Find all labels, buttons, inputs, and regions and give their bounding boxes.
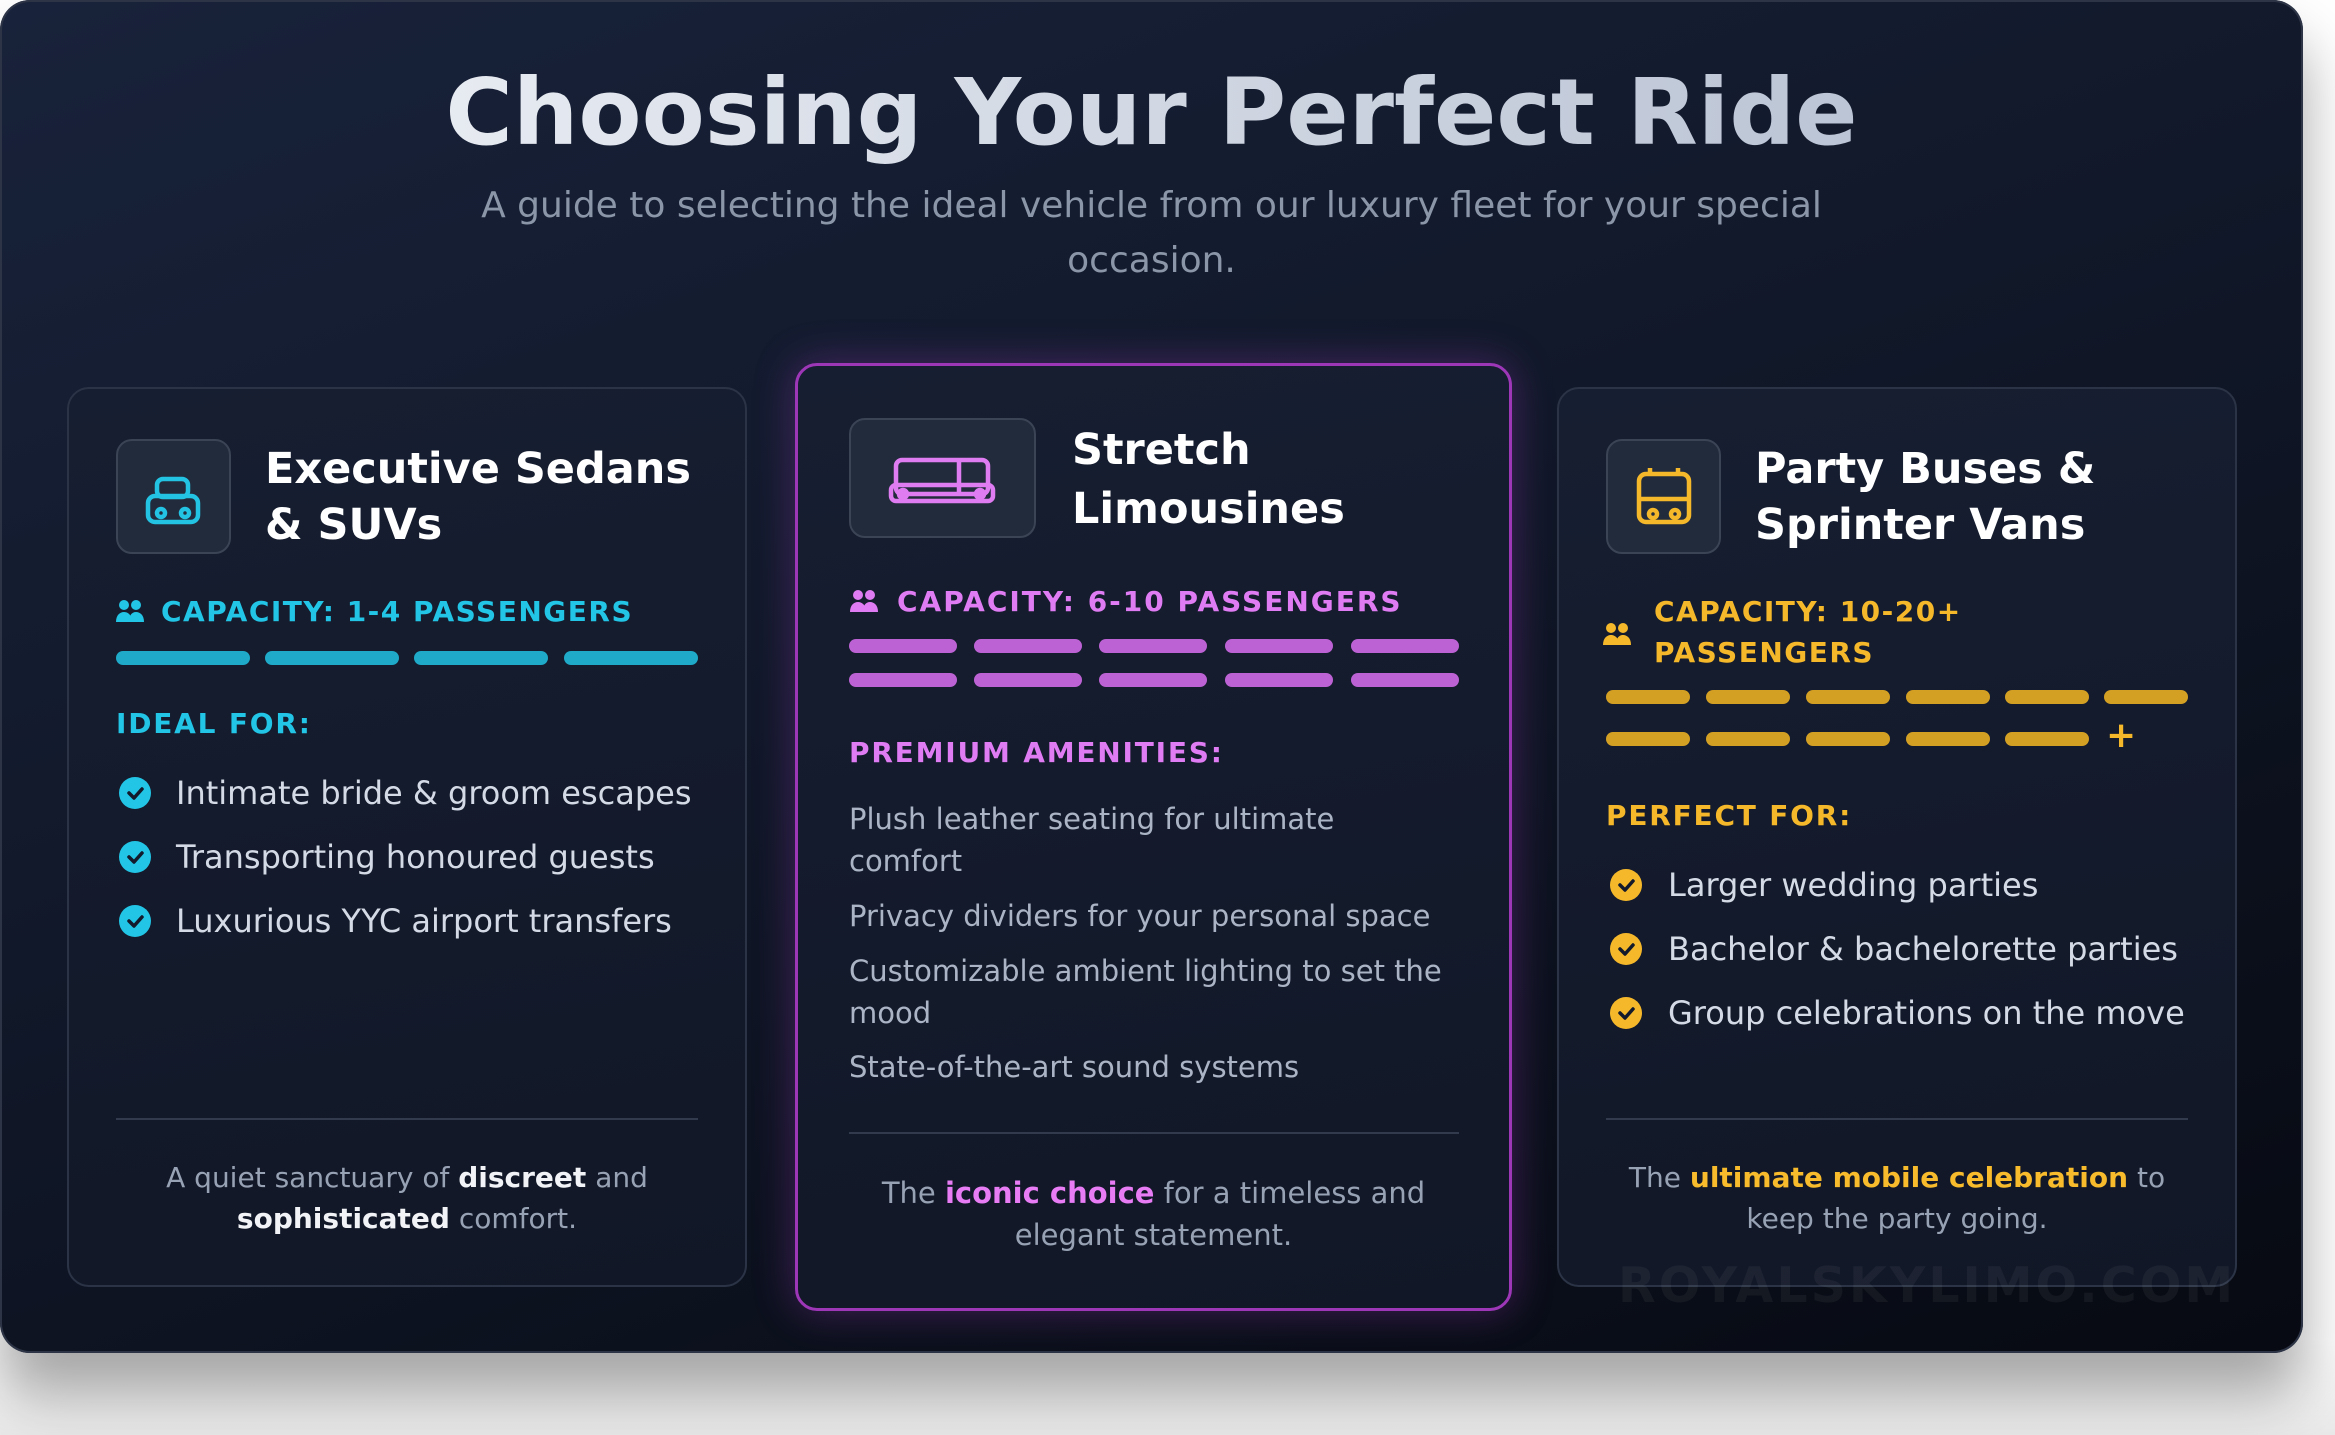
footer note [882,1176,1425,1252]
footer note: A quiet sanctuary of discreet and [166,1161,648,1194]
heading [1755,444,2095,550]
heading: Party Buses & [1755,444,2095,494]
amenities list: Plush leather seating for ultimate [849,802,1334,836]
amenities list: State-of-the-art sound systems [849,1050,1299,1084]
footer note: The ultimate mobile celebration to [1629,1161,2165,1194]
panel: stretch limousines [795,363,1512,1311]
panel: party buses [1557,387,2237,1287]
heading: Executive Sedans [265,444,691,494]
list: Group celebrations on the move [1668,994,2185,1032]
capacity: CAPACITY: 6-10 PASSENGERS [897,585,1403,618]
capacity [1603,595,1962,669]
footer note [166,1161,648,1235]
icon: limo [849,418,1036,538]
heading: Sprinter Vans [1755,500,2085,550]
subtitle: occasion. [1067,240,1236,281]
heading [1072,425,1345,534]
amenities list: comfort [849,844,962,878]
amenities list: mood [849,996,931,1030]
footer note: The iconic choice for a timeless and [882,1176,1425,1210]
ideal for heading: IDEAL FOR: [116,707,312,740]
subtitle: A guide to selecting the ideal vehicle from our luxury fleet for your special [481,185,1822,226]
heading: Limousines [1072,484,1345,534]
list: Larger wedding parties [1668,866,2038,904]
amenities list: Customizable ambient lighting to set the [849,954,1442,988]
footer note: elegant statement. [1015,1218,1292,1252]
amenities list [849,802,1442,1084]
subtitle [481,185,1822,281]
amenities list: Privacy dividers for your personal space [849,899,1430,933]
footer note: sophisticated comfort. [237,1202,577,1235]
list [119,774,692,940]
list [1610,866,2185,1032]
heading [265,444,691,550]
footer note [1628,1161,2165,1235]
heading: Stretch [1072,425,1251,475]
capacity: CAPACITY: 10-20+ [1654,595,1962,628]
capacity bars [116,651,698,665]
footer note: keep the party going. [1746,1202,2048,1235]
capacity bars: + [2106,715,2136,756]
heading: & SUVs [265,500,442,550]
capacity bars [1606,690,2188,756]
list: Transporting honoured guests [176,838,655,876]
watermark: ROYALSKYLIMO.COM [1618,1257,2236,1314]
capacity: CAPACITY: 1-4 PASSENGERS [161,595,633,628]
list: Intimate bride & groom escapes [176,774,692,812]
list: Luxurious YYC airport transfers [176,902,672,940]
title: Choosing Your Perfect Ride [445,59,1858,166]
panel: executive sedans [67,387,747,1287]
amenities heading: PREMIUM AMENITIES: [849,736,1224,769]
capacity: PASSENGERS [1654,636,1874,669]
icon: bus [1606,439,1721,554]
title [0,55,2303,171]
capacity bars [849,639,1459,687]
icon: sedan [116,439,231,554]
list: Bachelor & bachelorette parties [1668,930,2178,968]
perfect for heading: PERFECT FOR: [1606,799,1852,832]
